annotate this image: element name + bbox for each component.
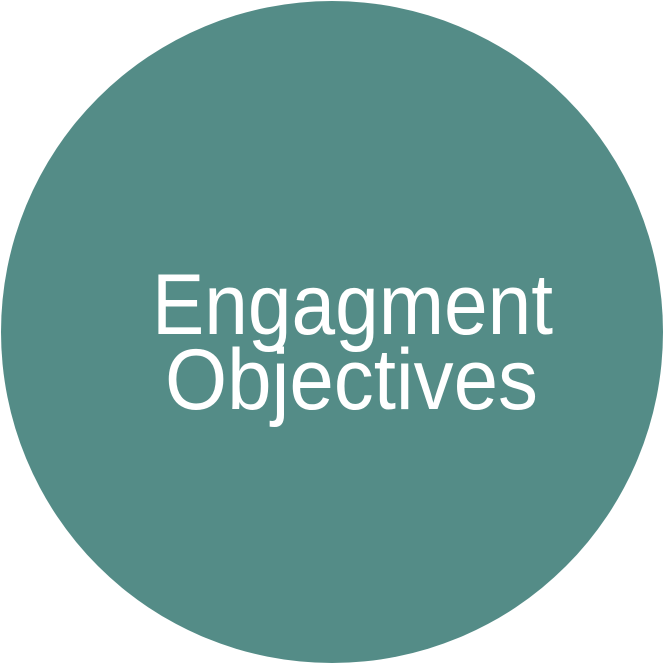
title: Engagment	[152, 257, 553, 353]
title	[152, 257, 553, 428]
title: Objectives	[165, 332, 538, 428]
